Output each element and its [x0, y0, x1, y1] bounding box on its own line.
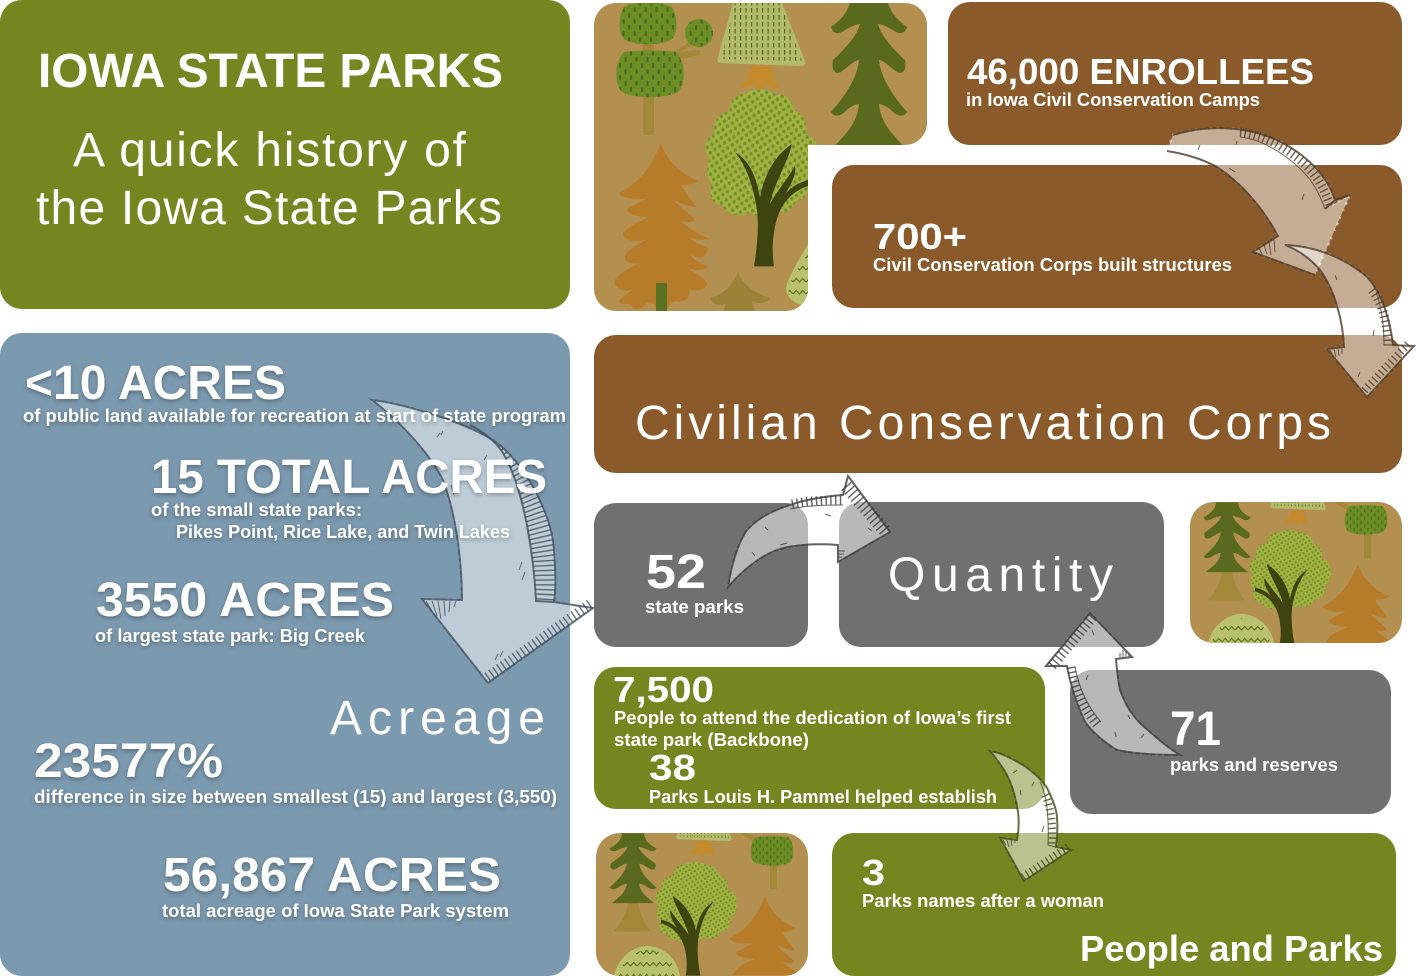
stat: 3 parks named after a woman	[862, 852, 1104, 911]
stat: 46,000 enrollees: in Iowa Civil Conservation Camps	[966, 90, 1260, 110]
stat: 15 total acres: Pikes Point, Rice Lake, and Twin Lakes	[176, 522, 510, 542]
stat: 56,867 acres: total acreage of Iowa State Park system	[162, 901, 509, 921]
stat: 7,500 people: People to attend the dedication of Iowa’s first	[614, 708, 1011, 728]
stat: 38 parks: 38	[649, 747, 696, 788]
panel: 7,500 people background	[594, 667, 1045, 809]
stat: 3550 acres: of largest state park: Big Creek	[95, 626, 366, 646]
heading: Quantity: Quantity	[888, 549, 1113, 602]
panel: enrollees background	[948, 2, 1402, 145]
panel: People and Parks background	[832, 833, 1396, 976]
stat: <10 acres: of public land available for recreation at start of state program	[23, 406, 566, 426]
panel: Quantity background	[839, 502, 1164, 647]
panel: 52 state parks background	[594, 503, 808, 647]
subtitle: quick history: A quick history of	[73, 124, 467, 177]
stat: 23577%: 23577%	[34, 735, 223, 788]
stat: 23577%	[34, 735, 557, 807]
arrow: 52 state parks to Quantity	[728, 476, 890, 587]
arrow: acreage to state parks	[372, 400, 593, 683]
stat: 71 parks and reserves	[1170, 703, 1338, 775]
stat: 56,867 acres: 56,867 ACRES	[163, 849, 501, 902]
stat: 46,000 enrollees: 46,000 ENROLLEES	[967, 51, 1314, 92]
stat: 3 parks named after a woman: Parks names after a woman	[862, 891, 1104, 911]
stat: <10 acres	[23, 357, 566, 426]
stat: 52 state parks	[645, 546, 744, 617]
heading: People and Parks: People and Parks	[1080, 928, 1383, 969]
stat: 7,500 people	[613, 669, 1011, 750]
stat: 52 state parks: 52	[646, 546, 706, 599]
stat: 700+ structures	[873, 216, 1232, 275]
image: forest illustration right	[1190, 502, 1402, 643]
arrow: structures to Civilian Conservation Corps	[1285, 245, 1414, 397]
stat: 700+ structures: Civil Conservation Corps built structures	[873, 255, 1232, 275]
stat: 71 parks and reserves: parks and reserves	[1170, 755, 1338, 775]
stat: 3550 acres: 3550 ACRES	[96, 574, 394, 627]
stat: <10 acres: <10 ACRES	[25, 357, 286, 410]
stat: 38 parks: Parks Louis H. Pammel helped establish	[649, 787, 997, 807]
heading: Iowa State Parks: IOWA STATE PARKS	[38, 45, 503, 98]
stat: 15 total acres: of the small state parks:	[151, 500, 362, 520]
stat: 56,867 acres	[162, 849, 509, 921]
heading: Civilian Conservation Corps: Civilian Conservation Corps	[635, 397, 1331, 450]
panel: structures background	[832, 165, 1402, 308]
arrow: enrollees to structures	[1167, 128, 1350, 275]
stat: 700+ structures: 700+	[873, 216, 967, 257]
stat: 15 total acres	[151, 451, 547, 542]
heading: Acreage: Acreage	[330, 692, 545, 745]
arrow: 7,500 people to People and Parks	[990, 751, 1071, 881]
subtitle: quick history	[36, 124, 502, 235]
stat: 71 parks and reserves: 71	[1170, 703, 1221, 756]
stat: 46,000 enrollees	[966, 51, 1314, 110]
stat: 23577%: difference in size between smallest (15) and largest (3,550)	[34, 787, 557, 807]
subtitle: quick history: the Iowa State Parks	[36, 182, 502, 235]
stat: 15 total acres: 15 TOTAL ACRES	[151, 451, 547, 504]
arrow: 71 parks to Quantity	[1046, 613, 1180, 755]
panel: 71 parks background	[1070, 670, 1391, 814]
panel: Civilian Conservation Corps background	[594, 335, 1402, 473]
stat: 38 parks	[649, 747, 997, 807]
image: L-shaped forest illustration	[594, 0, 927, 315]
stat: 52 state parks: state parks	[645, 597, 744, 617]
stat: 3 parks named after a woman: 3	[862, 852, 885, 893]
image: forest illustration bottom	[596, 833, 808, 976]
panel: acreage background	[0, 333, 570, 976]
stat: 7,500 people: 7,500	[613, 669, 714, 710]
stat: 7,500 people: state park (Backbone)	[614, 730, 809, 750]
panel: title background	[0, 0, 570, 309]
